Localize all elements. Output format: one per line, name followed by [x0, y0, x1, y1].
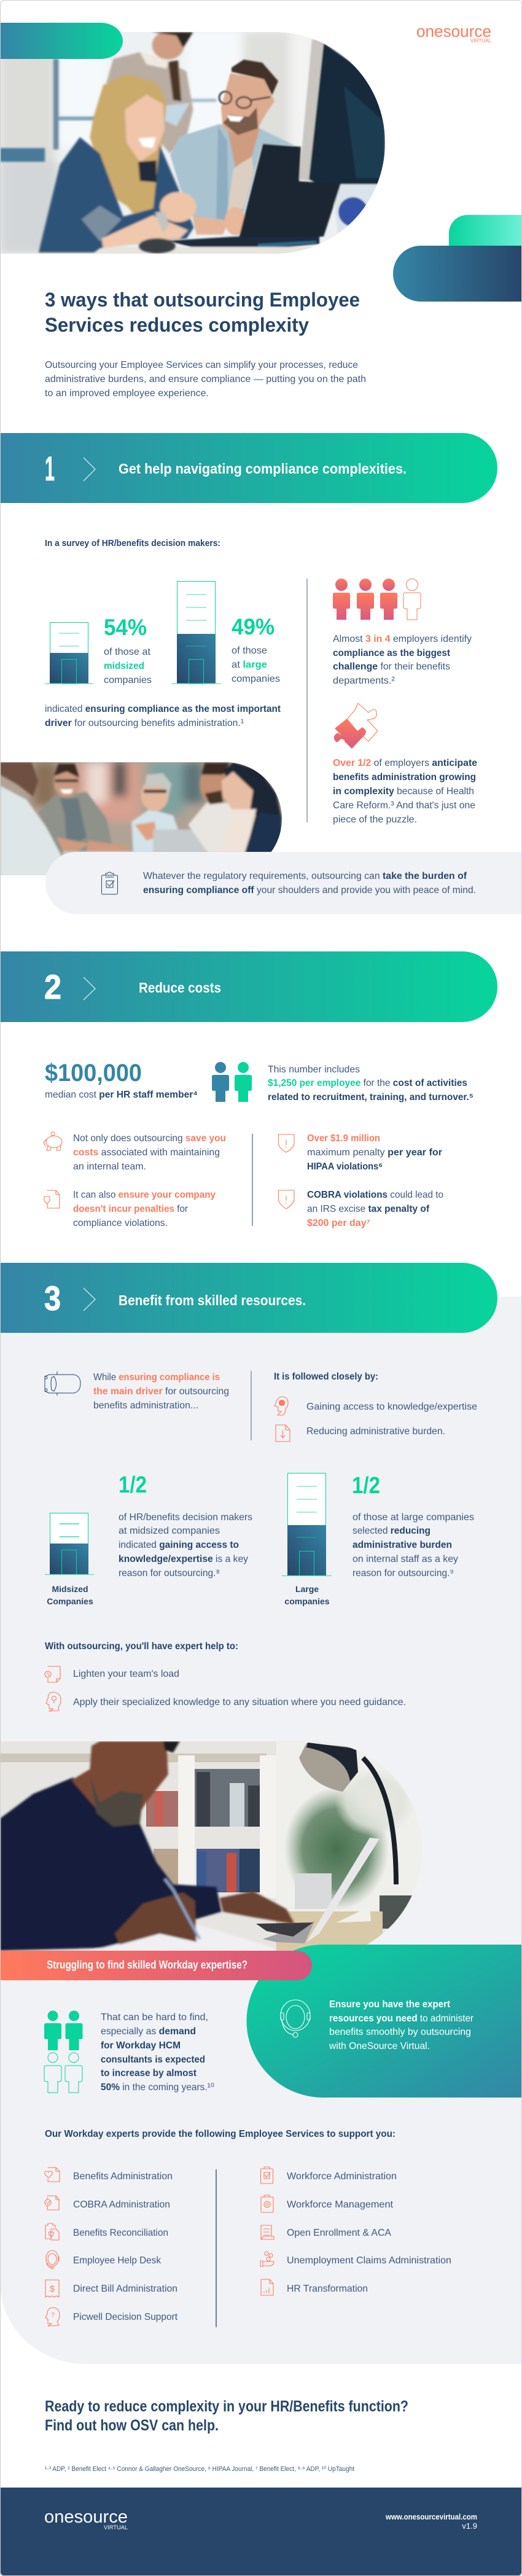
survey lead-in: In a survey of HR/benefits decision makers:	[45, 538, 220, 548]
footer logo: onesource	[44, 2507, 128, 2527]
call to action	[45, 2398, 408, 2434]
COBRA text: COBRA violations could lead to	[307, 1190, 443, 1200]
header photo: colleagues at laptop	[0, 31, 393, 254]
cost detail text: $1,250 per employee for the cost of activities	[268, 1078, 467, 1088]
icon: car top view	[45, 1372, 80, 1395]
stat $100,000	[45, 1060, 198, 1100]
stat 1/2 large: on internal staff as a key	[353, 1554, 458, 1564]
title: Services reduces complexity	[45, 314, 309, 336]
banner 2: Reduce costs	[139, 980, 221, 996]
stat 54%: of those at	[104, 647, 151, 657]
icon: head with globe	[275, 1397, 288, 1415]
Workday demand text: for Workday HCM	[101, 2040, 181, 2051]
icon: receipt dollar	[45, 2280, 59, 2297]
3 in 4 text: challenge for their benefits	[333, 662, 450, 672]
right accent tab	[449, 215, 522, 246]
stat $100,000: median cost per HR staff member⁴	[45, 1090, 198, 1100]
expert help heading: With outsourcing, you'll have expert help to:	[45, 1641, 238, 1652]
icon: document shield	[44, 1190, 60, 1208]
stat 49%: companies	[232, 674, 280, 684]
icon: clipboard gear	[261, 2195, 273, 2212]
banner: struggling with Workday: Struggling to find skilled Workday expertise?	[47, 1959, 247, 1971]
stat 49%: of those	[232, 646, 267, 656]
stat $100,000: $100,000	[45, 1060, 142, 1087]
callout: teal resources panel: resources you need to administer	[329, 2013, 474, 2024]
over 1/2 text: Care Reform.³ And that's just one	[333, 800, 475, 811]
stat 1/2 midsized: knowledge/expertise is a key	[119, 1554, 248, 1564]
reducing text: Reducing administrative burden.	[306, 1426, 445, 1437]
stat 54%	[104, 615, 152, 685]
question glyph: ?	[51, 2312, 55, 2319]
callout: teal resources panel: Ensure you have the expert	[329, 1999, 451, 2010]
service: direct bill: Direct Bill Administration	[73, 2284, 177, 2294]
icon: headset	[46, 2250, 59, 2269]
COBRA text: an IRS excise tax penalty of	[307, 1204, 430, 1214]
icon: clipboard check	[260, 2167, 273, 2184]
stat 49%	[232, 614, 280, 684]
service: unemployment: Unemployment Claims Administration	[287, 2255, 451, 2266]
stat 49%: at large	[232, 660, 267, 670]
icon: puzzle	[334, 703, 378, 749]
main driver text: While ensuring compliance is	[93, 1372, 220, 1383]
service: COBRA: COBRA Administration	[73, 2199, 170, 2210]
footer url and version: www.onesourcevirtual.com	[385, 2512, 477, 2521]
gaining access text: Gaining access to knowledge/expertise	[306, 1402, 477, 1412]
footer	[0, 2488, 522, 2576]
3 in 4 text: Almost 3 in 4 employers identify	[333, 634, 472, 644]
over 1/2 text	[333, 758, 477, 825]
icon: clipboard	[102, 872, 118, 894]
dollar glyph: $	[50, 2284, 55, 2293]
icon: 3 in 4 people	[333, 579, 421, 620]
building: large 2	[282, 1473, 332, 1576]
stat 49%: 49%	[232, 614, 275, 639]
icon: head question	[45, 2308, 60, 2326]
save costs text: costs associated with maintaining	[73, 1147, 220, 1158]
banner 3	[0, 1263, 497, 1333]
HIPAA text: Over $1.9 million	[307, 1133, 380, 1144]
save costs text: an internal team.	[73, 1161, 146, 1172]
callout: teal resources panel: with OneSource Virtual.	[329, 2041, 430, 2051]
intro paragraph: Outsourcing your Employee Services can simplify your processes, reduce	[45, 360, 358, 370]
stat 1/2 midsized: reason for outsourcing.⁸	[119, 1568, 220, 1579]
banner: struggling with Workday	[0, 1951, 312, 1980]
building: midsized	[45, 623, 93, 684]
icon: two people	[212, 1062, 252, 1102]
intro paragraph	[45, 360, 366, 399]
banner 3: 3	[44, 1279, 61, 1317]
3 in 4 text: departments.²	[333, 676, 395, 686]
over 1/2 text: piece of the puzzle.	[333, 814, 417, 825]
stat 54%: companies	[104, 675, 152, 685]
save costs text: Not only does outsourcing save you	[73, 1133, 226, 1144]
Workday demand text: That can be hard to find,	[101, 2012, 208, 2023]
icon: shield warning	[279, 1134, 294, 1152]
Workday demand text: 50% in the coming years.¹⁰	[101, 2082, 214, 2093]
COBRA text	[307, 1190, 443, 1228]
footer logo: VIRTUAL	[104, 2524, 128, 2531]
penalties text: It can also ensure your company	[73, 1190, 216, 1200]
penalties text: compliance violations.	[73, 1218, 168, 1228]
stat 1/2 large: selected reducing	[353, 1526, 430, 1536]
footer url and version	[385, 2512, 477, 2531]
intro paragraph: to an improved employee experience.	[45, 388, 209, 399]
title: 3 ways that outsourcing Employee	[45, 289, 360, 311]
footnote sources: ¹·³ ADP, ² Benefit Elect ⁴·⁵ Connor & Gallagher OneSource, ⁶ HIPAA Journal, ⁷ Benefit Elect, ⁸·⁹ ADP, ¹⁰ UpTaught	[45, 2465, 354, 2473]
right accent pill	[393, 246, 522, 302]
stat 1/2 large	[352, 1473, 474, 1579]
icon: document download	[276, 1425, 290, 1442]
stat 1/2 large: of those at large companies	[353, 1512, 474, 1523]
main driver text: the main driver for outsourcing	[93, 1386, 229, 1397]
penalties text	[73, 1190, 216, 1228]
save costs text	[73, 1133, 226, 1172]
icon: document clock	[45, 1666, 60, 1682]
callout: teal resources panel: benefits smoothly by outsourcing	[329, 2027, 471, 2037]
HIPAA text: HIPAA violations⁶	[307, 1161, 383, 1172]
icon: scroll document	[261, 2225, 274, 2239]
icon: head with bulb	[46, 1692, 61, 1711]
banner 2: 2	[44, 967, 61, 1006]
building: large	[172, 581, 221, 684]
over 1/2 text: benefits administration growing	[333, 772, 476, 783]
label midsized: Companies	[47, 1596, 93, 1606]
stat 1/2 midsized: of HR/benefits decision makers	[119, 1512, 252, 1523]
stat 54%: midsized	[104, 661, 144, 671]
stat 1/2 midsized: at midsized companies	[119, 1526, 220, 1536]
survey conclusion: driver for outsourcing benefits administration.¹	[45, 718, 244, 728]
survey conclusion: indicated ensuring compliance as the most important	[45, 704, 281, 714]
3 in 4 text: compliance as the biggest	[333, 648, 451, 658]
panel: section 3 background	[0, 1297, 522, 2364]
service: reconciliation: Benefits Reconciliation	[73, 2228, 168, 2238]
label large: companies	[284, 1596, 330, 1606]
photo: team discussion	[0, 762, 289, 879]
cost detail text: related to recruitment, training, and turnover.⁵	[268, 1092, 473, 1103]
over 1/2 text: Over 1/2 of employers anticipate	[333, 758, 477, 768]
lighten load text: Lighten your team's load	[73, 1669, 179, 1679]
icon: headset	[281, 2000, 310, 2037]
Workday demand text: consultants is expected	[101, 2055, 205, 2065]
callout: take the burden: Whatever the regulatory requirements, outsourcing can take the burden of	[143, 871, 467, 881]
icon: document check	[45, 2196, 59, 2210]
banner 1: 1	[45, 449, 55, 488]
service: benefits administration: Benefits Administration	[73, 2171, 173, 2182]
services heading: Our Workday experts provide the following Employee Services to support you:	[45, 2129, 395, 2139]
icon: four people	[44, 2011, 82, 2093]
stat 1/2 midsized	[119, 1472, 252, 1579]
stat 1/2 large: administrative burden	[353, 1540, 452, 1550]
main driver text	[93, 1372, 229, 1411]
main driver text: benefits administration...	[93, 1400, 198, 1411]
Workday demand text: to increase by almost	[101, 2068, 197, 2078]
3 in 4 text	[333, 634, 472, 686]
title	[45, 289, 360, 336]
stat 1/2 midsized: indicated gaining access to	[119, 1540, 239, 1550]
footer url and version: v1.9	[462, 2521, 477, 2531]
building: midsized 2	[45, 1513, 94, 1575]
call to action: Find out how OSV can help.	[45, 2417, 219, 2434]
callout: take the burden: ensuring compliance off your shoulders and provide you with peace of mind.	[143, 885, 476, 896]
HIPAA text: maximum penalty per year for	[307, 1147, 442, 1158]
cost detail text	[268, 1064, 473, 1103]
banner 2	[0, 951, 497, 1022]
icon: clipboard heart	[45, 2223, 59, 2240]
banner 1	[0, 433, 497, 503]
callout: teal resources panel	[246, 1945, 522, 2098]
icon: document heart	[45, 2168, 60, 2182]
service: workforce management: Workforce Management	[287, 2199, 394, 2210]
service: open enrollment: Open Enrollment & ACA	[287, 2228, 391, 2238]
top-left accent pill	[0, 23, 123, 59]
service: help desk: Employee Help Desk	[73, 2255, 162, 2266]
icon: hand coins	[260, 2252, 274, 2266]
label midsized	[47, 1584, 93, 1606]
logo: onesource virtual: VIRTUAL	[470, 37, 491, 44]
service: HR transformation: HR Transformation	[287, 2284, 368, 2294]
COBRA text: $200 per day⁷	[307, 1218, 370, 1228]
followed closely heading: It is followed closely by:	[274, 1372, 378, 1382]
icon: shield warning 2	[279, 1190, 294, 1209]
stat 1/2 large: reason for outsourcing.⁹	[353, 1568, 454, 1579]
label large	[284, 1584, 330, 1606]
Workday demand text: especially as demand	[101, 2026, 196, 2037]
HIPAA text	[307, 1133, 442, 1172]
banner 3: Benefit from skilled resources.	[119, 1292, 306, 1308]
stat 54%: 54%	[104, 615, 147, 640]
stat 1/2 large: 1/2	[352, 1473, 380, 1499]
logo: onesource virtual: onesource	[416, 22, 491, 41]
callout: take the burden	[45, 852, 522, 914]
cost detail text: This number includes	[268, 1064, 360, 1075]
icon: piggy bank	[44, 1132, 62, 1150]
label midsized: Midsized	[52, 1584, 88, 1594]
service: picwell: Picwell Decision Support	[73, 2312, 178, 2322]
stat 1/2 midsized: 1/2	[119, 1472, 147, 1498]
penalties text: doesn't incur penalties for	[73, 1204, 189, 1214]
service: workforce admin: Workforce Administration	[287, 2171, 397, 2182]
label large: Large	[295, 1584, 319, 1594]
photo: man working at desk	[0, 1741, 430, 1953]
specialized knowledge text: Apply their specialized knowledge to any situation where you need guidance.	[73, 1697, 406, 1708]
intro paragraph: administrative burdens, and ensure compliance — putting you on the path	[45, 374, 366, 384]
survey conclusion	[45, 704, 281, 728]
icon: document chart	[261, 2279, 273, 2295]
banner 1: Get help navigating compliance complexities.	[119, 461, 407, 477]
over 1/2 text: in complexity because of Health	[333, 786, 474, 797]
call to action: Ready to reduce complexity in your HR/Benefits function?	[45, 2398, 408, 2415]
Workday demand text	[101, 2012, 214, 2093]
